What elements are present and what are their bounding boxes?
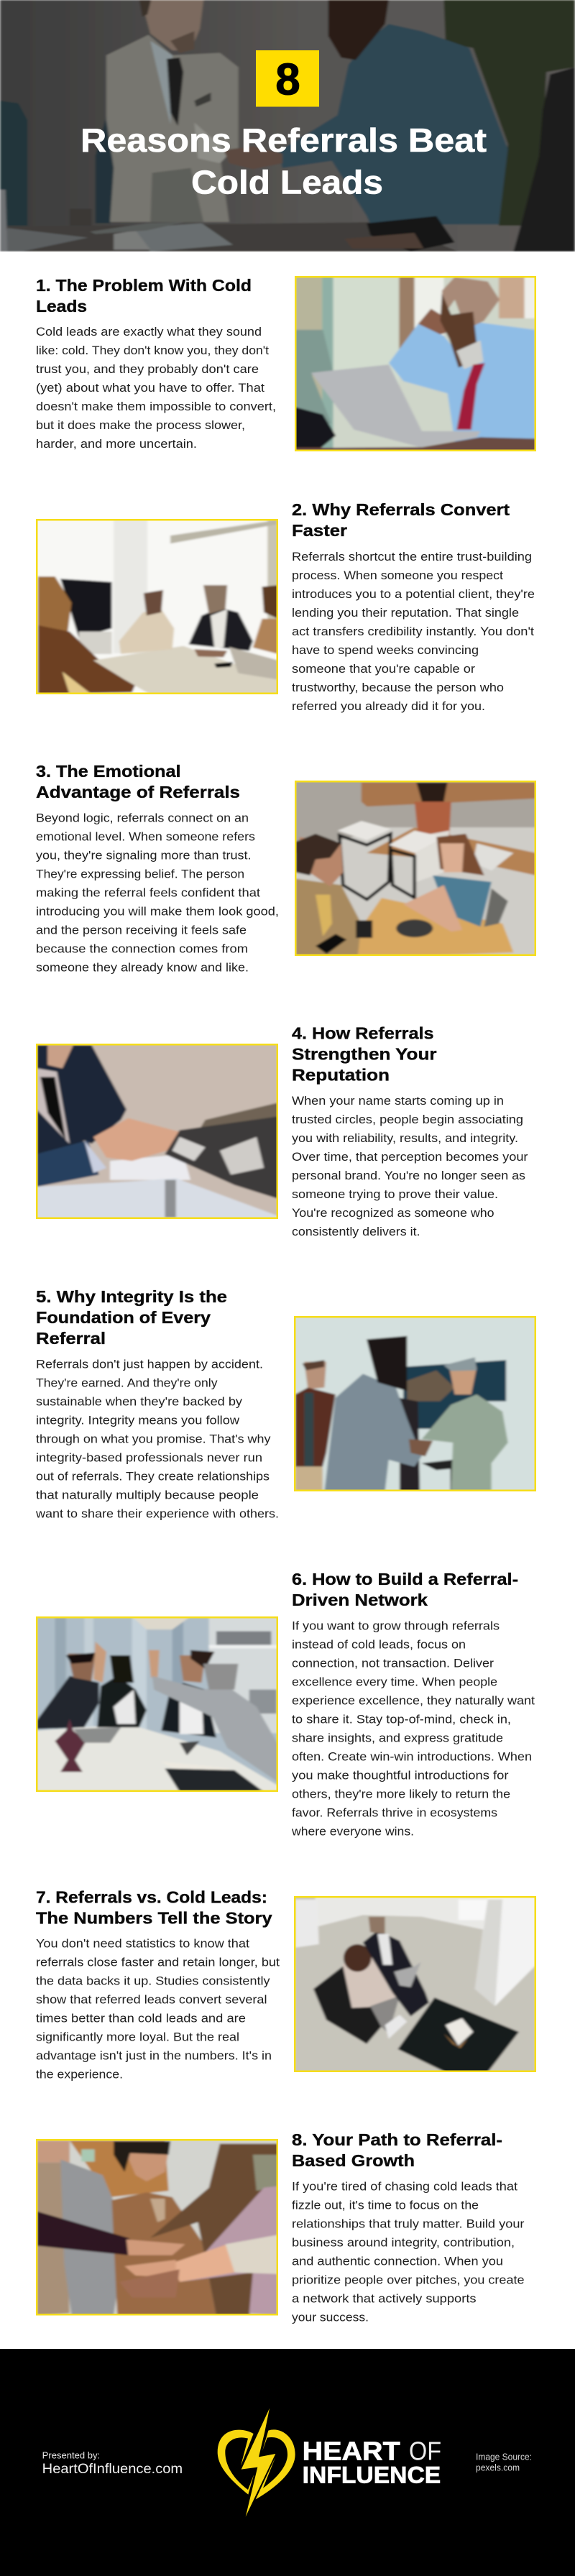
body text 1: (yet) about what you have to offer. That (36, 382, 264, 395)
body text 3: someone they already know and like. (36, 962, 249, 975)
heading 4: Strengthen Your (292, 1045, 437, 1064)
body text 7: show that referred leads convert several (36, 1994, 267, 2007)
heading 7: The Numbers Tell the Story (36, 1909, 272, 1928)
body text 6 (291, 1620, 535, 1839)
body text 6: where everyone wins. (291, 1826, 414, 1839)
heading 1: Leads (36, 297, 87, 316)
body text 3: you, they're signaling more than trust. (36, 850, 252, 862)
body text 6: others, they're more likely to return the (292, 1788, 510, 1801)
heading 4: Reputation (292, 1065, 390, 1084)
wordmark (303, 2436, 441, 2488)
body text 6: If you want to grow through referrals (292, 1620, 500, 1633)
body text 2: trustworthy, because the person who (292, 681, 504, 694)
body text 5: They're earned. And they're only (36, 1377, 218, 1390)
body text 8: a network that actively supports (292, 2293, 477, 2306)
heading 2 (292, 500, 510, 540)
body text 5: want to share their experience with others. (35, 1508, 279, 1521)
hero photo: handshake (0, 0, 575, 252)
body text 8: fizzle out, it's time to focus on the (292, 2199, 479, 2212)
body text 6: experience excellence, they naturally want (292, 1695, 535, 1708)
logo: heart of influence (218, 2409, 441, 2517)
heading 2: Faster (292, 521, 347, 540)
body text 1: but it does make the process slower, (36, 419, 245, 432)
body text 1: harder, and more uncertain. (36, 438, 197, 451)
body text 5: integrity. Integrity means you follow (36, 1414, 239, 1427)
body text 2: referred you already did it for you. (292, 700, 485, 713)
body text 2: someone that you're capable or (292, 663, 476, 676)
body text 6: connection, not transaction. Deliver (292, 1657, 494, 1670)
image source: Image Source: (476, 2452, 532, 2462)
body text 4: trusted circles, people begin associating (292, 1113, 523, 1126)
photo: handshake over documents (36, 1044, 278, 1219)
panel: section 2 (36, 500, 535, 713)
body text 1: Cold leads are exactly what they sound (36, 326, 262, 339)
body text 4: consistently delivers it. (292, 1225, 420, 1238)
image source (476, 2452, 532, 2472)
body text 2: introduces you to a potential client, they're (292, 588, 535, 601)
panel: section 4 (36, 1024, 528, 1238)
wordmark: OF (409, 2436, 441, 2465)
photo: business introduction (294, 1316, 536, 1491)
body text 1: like: cold. They don't know you, they don't (36, 344, 269, 357)
body text 7: advantage isn't just in the numbers. It's in (36, 2050, 272, 2063)
photo: aerial view of meeting (294, 1896, 536, 2072)
photo: team hands stacked (36, 2139, 278, 2316)
body text 3: making the referral feels confident that (36, 887, 260, 900)
body text 7: the data backs it up. Studies consistently (36, 1975, 270, 1988)
photo: cafe conversation (295, 781, 536, 956)
body text 1 (36, 326, 276, 451)
body text 3: Beyond logic, referrals connect on an (36, 812, 249, 825)
heading 1: 1. The Problem With Cold (36, 276, 252, 295)
body text 3: because the connection comes from (36, 943, 248, 956)
panel: section 1 (36, 276, 536, 451)
body text 8: If you're tired of chasing cold leads that (292, 2181, 518, 2194)
heading 5: Referral (36, 1329, 106, 1348)
body text 2: Referrals shortcut the entire trust-building (292, 551, 532, 564)
body text 7: times better than cold leads and are (36, 2012, 246, 2025)
body text 2: act transfers credibility instantly. You don't (292, 625, 534, 638)
heading 6: Driven Network (292, 1591, 428, 1609)
body text 3: introducing you will make them look good, (36, 906, 279, 919)
body text 1: trust you, and they probably don't care (36, 363, 259, 376)
body text 8: and authentic connection. When you (292, 2255, 503, 2268)
body text 6: favor. Referrals thrive in ecosystems (292, 1807, 497, 1820)
heading 8: Based Growth (292, 2151, 415, 2170)
photo: meeting at table (36, 519, 278, 694)
title: Reasons Referrals Beat (80, 121, 487, 159)
heading 6: 6. How to Build a Referral- (292, 1570, 518, 1588)
body text 5 (35, 1358, 279, 1521)
body text 4: you with reliability, results, and integrity. (292, 1132, 518, 1145)
heading 6 (292, 1570, 518, 1609)
body text 5: that naturally multiply because people (36, 1489, 259, 1502)
body text 8 (292, 2181, 525, 2324)
heading 4 (292, 1024, 437, 1084)
heading 8 (292, 2130, 502, 2170)
panel: section 6 (36, 1570, 535, 1839)
image source: pexels.com (476, 2462, 520, 2472)
body text 7: the experience. (36, 2069, 123, 2082)
body text 8: relationships that truly matter. Build your (292, 2218, 525, 2231)
body text 4: You're recognized as someone who (292, 1207, 494, 1220)
hero banner (0, 0, 575, 252)
body text 7 (36, 1938, 280, 2082)
heading 5: Foundation of Every (36, 1308, 211, 1327)
heading 7: 7. Referrals vs. Cold Leads: (36, 1887, 267, 1906)
body text 5: sustainable when they're backed by (36, 1396, 243, 1409)
heading 7 (36, 1887, 272, 1928)
heading 4: 4. How Referrals (292, 1024, 434, 1042)
body text 5: Referrals don't just happen by accident. (36, 1358, 263, 1371)
presented by: Presented by: (42, 2450, 100, 2461)
panel: section 3 (36, 762, 536, 975)
body text 4 (292, 1095, 528, 1238)
heading 2: 2. Why Referrals Convert (292, 500, 510, 519)
body text 7: referrals close faster and retain longer, but (36, 1956, 280, 1969)
title: Cold Leads (191, 164, 383, 201)
body text 4: Over time, that perception becomes your (292, 1151, 528, 1164)
body text 5: integrity-based professionals never run (36, 1452, 262, 1465)
photo: team high five (36, 1616, 278, 1792)
heading 3: Advantage of Referrals (36, 783, 240, 801)
body text 6: instead of cold leads, focus on (292, 1639, 466, 1652)
body text 8: business around integrity, contribution, (292, 2237, 515, 2250)
heading 8: 8. Your Path to Referral- (292, 2130, 502, 2149)
presented by (42, 2450, 183, 2477)
body text 4: When your name starts coming up in (292, 1095, 504, 1108)
heading 5 (36, 1287, 227, 1348)
panel: section 7 (36, 1887, 536, 2082)
heading 3 (36, 762, 240, 801)
body text 6: share insights, and express gratitude (292, 1732, 503, 1745)
body text 8: your success. (292, 2312, 369, 2324)
body text 8: prioritize people over pitches, you create (292, 2274, 525, 2287)
body text 7: You don't need statistics to know that (36, 1938, 249, 1951)
body text 4: personal brand. You're no longer seen as (292, 1169, 525, 1182)
body text 3: They're expressing belief. The person (36, 868, 244, 881)
body text 4: someone trying to prove their value. (292, 1188, 498, 1201)
number badge (256, 50, 319, 106)
body text 6: excellence every time. When people (292, 1676, 497, 1689)
title (80, 121, 487, 201)
body text 3: emotional level. When someone refers (36, 831, 255, 844)
panel: section 5 (35, 1287, 536, 1521)
body text 6: often. Create win-win introductions. When (292, 1751, 532, 1764)
body text 7: significantly more loyal. But the real (36, 2031, 239, 2044)
body text 2: have to spend weeks convincing (292, 644, 479, 657)
presented by: HeartOfInfluence.com (42, 2462, 183, 2477)
body text 5: through on what you promise. That's why (36, 1433, 271, 1446)
body text 2 (292, 551, 535, 713)
body text 3: and the person receiving it feels safe (36, 924, 247, 937)
heading 3: 3. The Emotional (36, 762, 181, 781)
footer (0, 2349, 575, 2576)
body text 2: lending you their reputation. That single (292, 607, 519, 620)
body text 5: out of referrals. They create relationships (36, 1471, 270, 1484)
icon: heart with lightning bolt (218, 2409, 295, 2517)
wordmark: INFLUENCE (303, 2462, 441, 2488)
number badge: 8 (275, 55, 300, 105)
body text 3 (36, 812, 279, 975)
heading 5: 5. Why Integrity Is the (36, 1287, 227, 1306)
body text 6: to share it. Stay top-of-mind, check in, (292, 1714, 511, 1726)
photo: stressed man at laptop (295, 276, 536, 451)
heading 1 (36, 276, 252, 316)
body text 1: doesn't make them impossible to convert, (36, 400, 276, 413)
body text 2: process. When someone you respect (292, 569, 503, 582)
panel: section 8 (36, 2130, 525, 2324)
wordmark: HEART (303, 2436, 400, 2465)
body text 6: you make thoughtful introductions for (292, 1770, 509, 1782)
